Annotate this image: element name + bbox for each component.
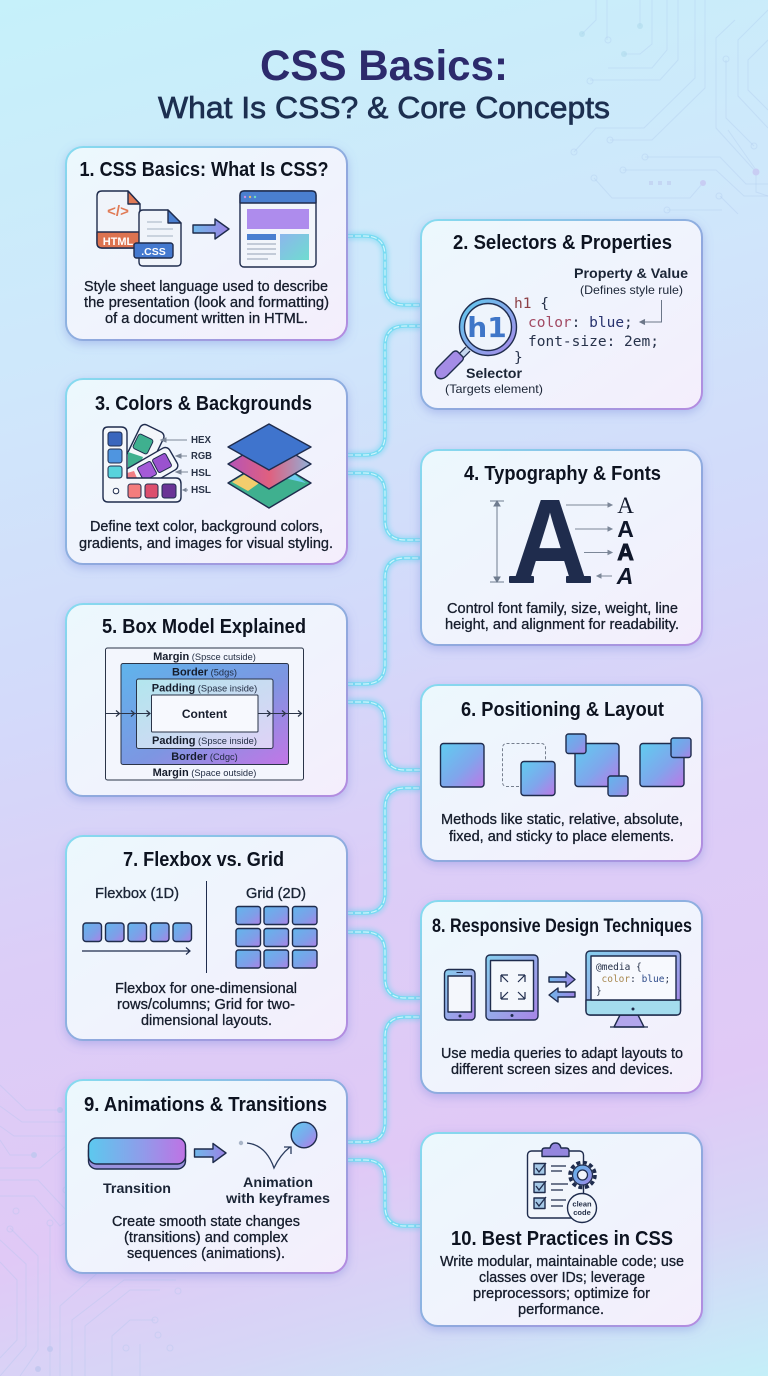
description: card 10 (440, 1254, 684, 1318)
icon: phone (444, 970, 475, 1020)
heading: card 2: 2. Selectors & Properties (453, 232, 672, 254)
panel: 2. Selectors & Properties (421, 220, 702, 409)
label: animation with keyframes (225, 1174, 330, 1206)
diagram: box model: Border (Cdgc) (171, 751, 238, 763)
labels: font variant letters: A (617, 539, 634, 565)
diagram: box model: Padding (Spsce inside) (152, 735, 257, 747)
arrows: font variants (566, 503, 612, 578)
heading: card 6: 6. Positioning & Layout (461, 699, 664, 721)
label: animation with keyframes: Animation (243, 1174, 313, 1190)
icon: HTML document: HTML (103, 236, 134, 248)
description: card 4: Control font family, size, weight, line (447, 601, 678, 617)
icon: fixed or sticky box (640, 738, 691, 786)
icon: relative box (502, 744, 555, 796)
panel: 10. Best Practices in CSS (421, 1133, 702, 1326)
label: selector: (Targets element) (445, 382, 543, 396)
diagram: box model: Margin (Spsce cutside) (153, 651, 256, 663)
label: transition: Transition (103, 1180, 171, 1196)
code snippet: font-size: 2em; (528, 334, 659, 350)
heading: card 7: 7. Flexbox vs. Grid (123, 849, 284, 871)
description: card 8 (441, 1046, 683, 1078)
description: card 9: Create smooth state changes (112, 1214, 300, 1230)
description: card 9 (112, 1214, 300, 1262)
arrows: color format pointers (161, 438, 188, 492)
heading: card 5: 5. Box Model Explained (102, 616, 306, 638)
label: flexbox: Flexbox (1D) (95, 885, 179, 902)
icon: CSS document: .CSS (141, 246, 166, 258)
icon: styled browser page (240, 191, 316, 267)
description: card 3: gradients, and images for visual styling. (79, 536, 333, 552)
panel: 5. Box Model Explained (66, 604, 347, 796)
icon: checklist clipboard with gear and clean code badge: code (573, 1208, 591, 1217)
label: selector: Selector (466, 365, 523, 381)
description: card 7: Flexbox for one-dimensional (115, 981, 297, 997)
description: card 8: Use media queries to adapt layouts to (441, 1046, 683, 1062)
description: card 6 (441, 812, 683, 845)
label: grid: Grid (2D) (246, 885, 306, 902)
description: card 7: dimensional layouts. (141, 1013, 272, 1029)
diagram: box model: Border (5dgs) (172, 666, 237, 678)
description: card 6: Methods like static, relative, absolute, (441, 812, 683, 828)
diagram: box model: Margin (Space outside) (153, 767, 256, 779)
icon: static box (440, 744, 484, 787)
labels: font variant letters: A (617, 493, 634, 518)
icon: checklist clipboard with gear and clean code badge: clean (572, 1200, 592, 1208)
connector: card 7 to card 6 (347, 788, 421, 913)
panel: 6. Positioning & Layout (421, 685, 702, 861)
heading: card 10: 10. Best Practices in CSS (451, 1228, 673, 1250)
connector: card 9 to card 10 (347, 1160, 421, 1226)
icon: magnifying glass with h1: h1 (467, 311, 507, 344)
description: card 4 (445, 601, 679, 633)
connector: card 3 to card 4 (347, 473, 421, 540)
connector: card 1 to card 2 (347, 236, 421, 305)
diagram: grid layout (236, 906, 317, 968)
arrows: scale between devices (549, 972, 575, 1002)
description: card 10: classes over IDs; leverage (479, 1270, 645, 1286)
heading: card 1: 1. CSS Basics: What Is CSS? (80, 159, 328, 181)
icon: stacked background layers (228, 424, 311, 508)
description: card 10: performance. (518, 1302, 604, 1318)
description: card 3 (79, 519, 333, 552)
arrow: property pointer (640, 300, 662, 324)
description: card 9: sequences (animations). (127, 1246, 285, 1262)
diagram: box model: Padding (Spase inside) (152, 682, 257, 694)
labels: color formats: HEX (191, 434, 211, 446)
heading: card 8: 8. Responsive Design Techniques (432, 916, 692, 937)
panel: 4. Typography & Fonts (421, 450, 702, 645)
label: animation with keyframes: with keyframes (225, 1190, 330, 1206)
panel: 9. Animations & Transitions (66, 1080, 347, 1273)
icon: keyframe animation path (239, 1122, 317, 1168)
labels: color formats: RGB (191, 450, 212, 462)
title: What Is CSS? & Core Concepts (158, 90, 610, 125)
label: selector (445, 365, 543, 396)
icon: CSS document (134, 210, 181, 266)
description: card 7 (115, 981, 297, 1029)
title (158, 42, 610, 125)
description: card 9: (transitions) and complex (124, 1230, 288, 1246)
code snippet (514, 296, 659, 366)
description: card 3: Define text color, background colors, (90, 519, 323, 535)
panel: 1. CSS Basics (66, 147, 347, 340)
description: card 1: the presentation (look and formatting) (84, 295, 329, 311)
diagram: box model: Content (182, 707, 227, 721)
description: card 1: Style sheet language used to describe (84, 279, 328, 295)
arrow: transition direction (194, 1144, 226, 1162)
connector: card 3 to card 2 (347, 326, 421, 455)
code snippet: } (514, 350, 523, 366)
description: card 1 (84, 279, 329, 327)
code snippet: h1 { (514, 296, 549, 312)
heading: card 9: 9. Animations & Transitions (84, 1094, 327, 1116)
arrow: height dimension (490, 501, 504, 582)
labels: color formats: HSL (191, 467, 212, 479)
code snippet: color: blue; (528, 315, 633, 331)
label: property and value: Property & Value (574, 265, 688, 281)
labels: font variant letters: A (617, 516, 634, 542)
connector: card 7 to card 8 (347, 932, 421, 998)
icon: desktop monitor with media query: } (596, 986, 602, 997)
icon: HTML document: </> (107, 203, 129, 220)
icon: HTML document (97, 191, 140, 248)
labels: color formats (191, 434, 212, 496)
diagram: box model (106, 648, 304, 780)
panel: 3. Colors & Backgrounds (66, 379, 347, 564)
description: card 10: preprocessors; optimize for (473, 1286, 650, 1302)
heading: card 3: 3. Colors & Backgrounds (95, 393, 312, 415)
icon: color swatch fan (103, 423, 181, 502)
description: card 4: height, and alignment for readability. (445, 617, 679, 633)
connector: card 9 to card 8 (347, 1017, 421, 1142)
labels: font variant letters: A (616, 563, 633, 589)
icon: desktop monitor with media query: @media { (596, 962, 642, 973)
icon: large letter A: A (511, 475, 589, 608)
diagram: flexbox row (82, 923, 192, 954)
icon: checklist clipboard with gear and clean code badge (528, 1143, 596, 1222)
icon: desktop monitor with media query (586, 951, 680, 1027)
background circuit pattern: top right (571, 0, 768, 214)
background circuit pattern: bottom left (0, 1085, 181, 1376)
icon: desktop monitor with media query: color: blue; (602, 974, 670, 985)
description: card 1: of a document written in HTML. (105, 311, 308, 327)
arrow: HTML and CSS to page (193, 219, 229, 239)
icon: transition pill (88, 1138, 186, 1169)
icon: tablet (486, 955, 538, 1020)
label: property and value (574, 265, 688, 297)
description: card 6: fixed, and sticky to place elements. (449, 829, 674, 845)
panel: 8. Responsive Design Techniques (421, 901, 702, 1093)
title: CSS Basics: (260, 42, 508, 90)
connector: card 5 to card 4 (347, 558, 421, 684)
icon: absolute boxes (566, 734, 628, 796)
description: card 7: rows/columns; Grid for two- (117, 997, 295, 1013)
labels: font variant letters (616, 493, 634, 589)
labels: color formats: HSL (191, 484, 212, 496)
description: card 8: different screen sizes and devices. (451, 1062, 673, 1078)
icon: magnifying glass with h1 (435, 298, 516, 379)
panel: 7. Flexbox vs. Grid (66, 836, 347, 1040)
label: property and value: (Defines style rule) (580, 283, 683, 297)
description: card 10: Write modular, maintainable code; use (440, 1254, 684, 1270)
connector: card 5 to card 6 (347, 702, 421, 770)
heading: card 4: 4. Typography & Fonts (464, 463, 661, 485)
